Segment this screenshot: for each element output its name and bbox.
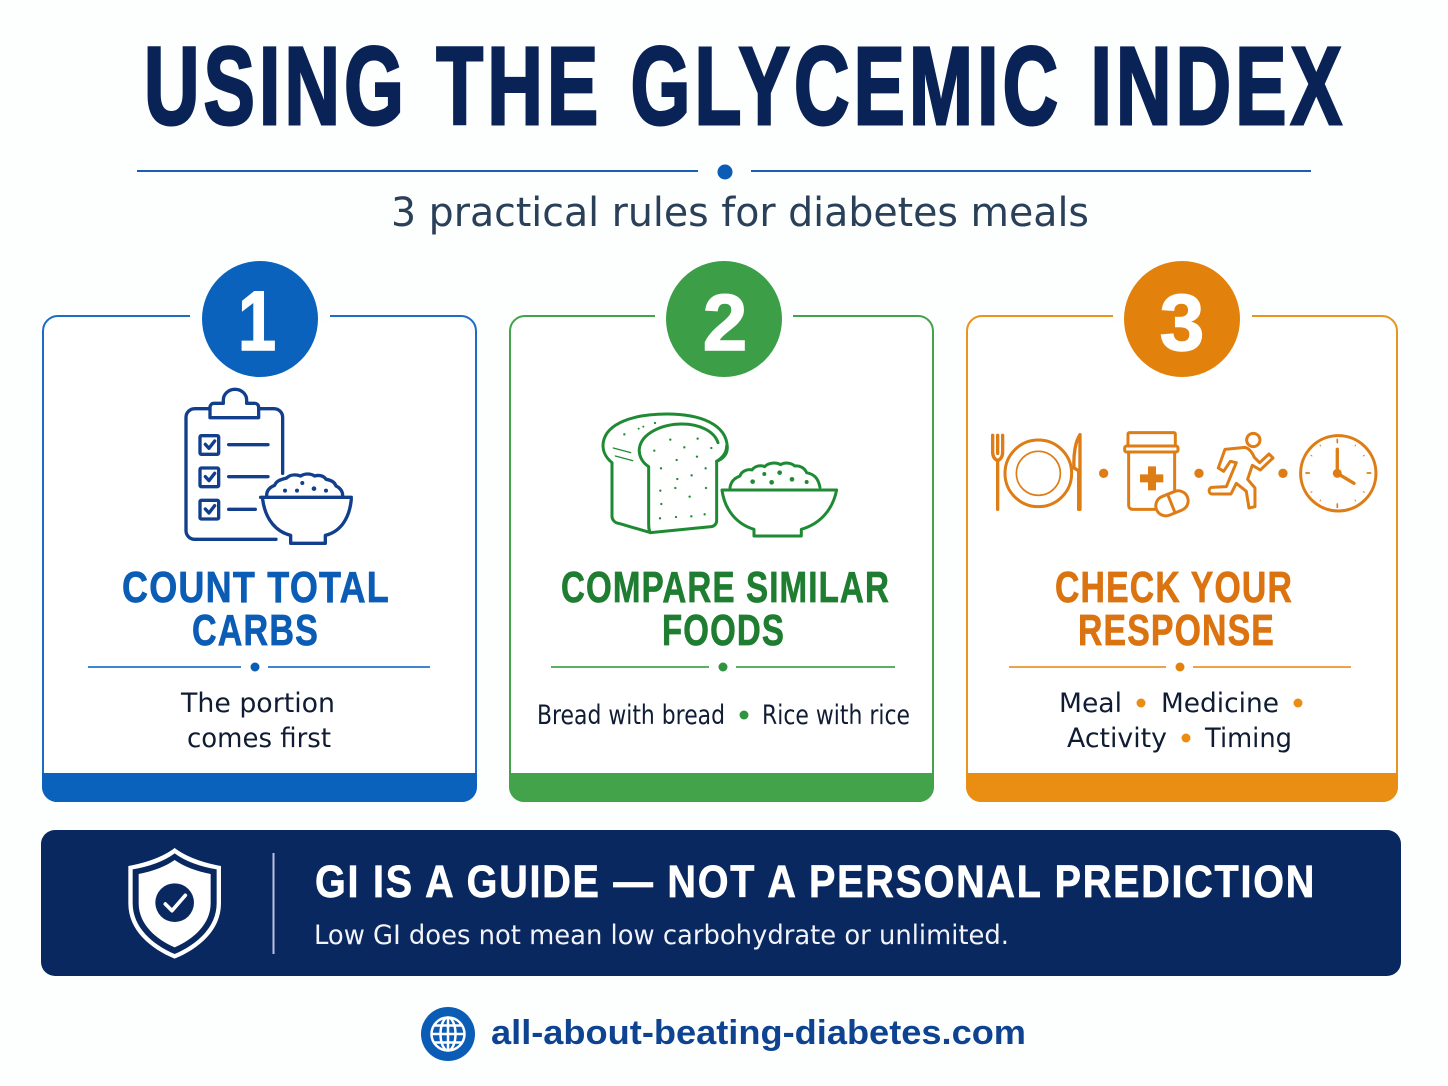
icon: clipboard checklist with rice bowl [186,389,351,543]
heading: count total carbs: CARBS [192,606,319,655]
body text: the portion comes first [180,688,335,754]
callout banner [41,830,1401,976]
icon: bread loaf and rice bowl [603,414,837,536]
number badge 1: 1 [238,275,276,369]
number badge 3: 3 [1160,278,1204,367]
number badge 3 [1124,261,1240,377]
panel: rule 1 count total carbs [42,261,477,802]
body text: the portion comes first: comes first [187,723,331,754]
number badge 2: 2 [703,278,747,367]
callout heading: GI IS A GUIDE — NOT A PERSONAL PREDICTION [315,856,1316,907]
website address: all-about-beating-diabetes.com [491,1014,1026,1052]
icon: shield with check [128,848,221,959]
footer website link [421,1007,1026,1061]
body text: the portion comes first: The portion [180,688,335,719]
number badge 2 [666,261,782,377]
heading: check your response [1055,563,1293,655]
body text: meal, medicine, activity, timing: Activity [1067,723,1167,754]
icon: globe [421,1007,475,1061]
body text: meal, medicine, activity, timing: Meal [1059,688,1122,719]
heading: compare similar foods: FOODS [662,606,785,655]
number badge 1 [202,261,318,377]
heading: count total carbs [122,563,390,655]
icon: meal, medicine, activity and timing row [993,433,1376,519]
subtitle: 3 practical rules for diabetes meals [391,190,1089,236]
heading: count total carbs: COUNT TOTAL [122,563,390,612]
body text: bread with bread, rice with rice: Rice with rice [762,700,910,731]
panel: rule 2 compare similar foods [509,261,934,802]
body text: meal, medicine, activity, timing: Timing [1204,723,1292,754]
body text: bread with bread, rice with rice: Bread with bread [537,700,725,731]
callout body text: Low GI does not mean low carbohydrate or unlimited. [314,920,1009,951]
heading: check your response: RESPONSE [1078,606,1275,655]
body text: bread with bread, rice with rice [537,700,910,731]
heading: check your response: CHECK YOUR [1055,563,1293,612]
body text: meal, medicine, activity, timing [1059,688,1302,754]
heading: compare similar foods: COMPARE SIMILAR [561,563,890,612]
heading: compare similar foods [561,563,890,655]
body text: meal, medicine, activity, timing: Medicine [1161,688,1279,719]
panel: rule 3 check your response [966,261,1398,802]
